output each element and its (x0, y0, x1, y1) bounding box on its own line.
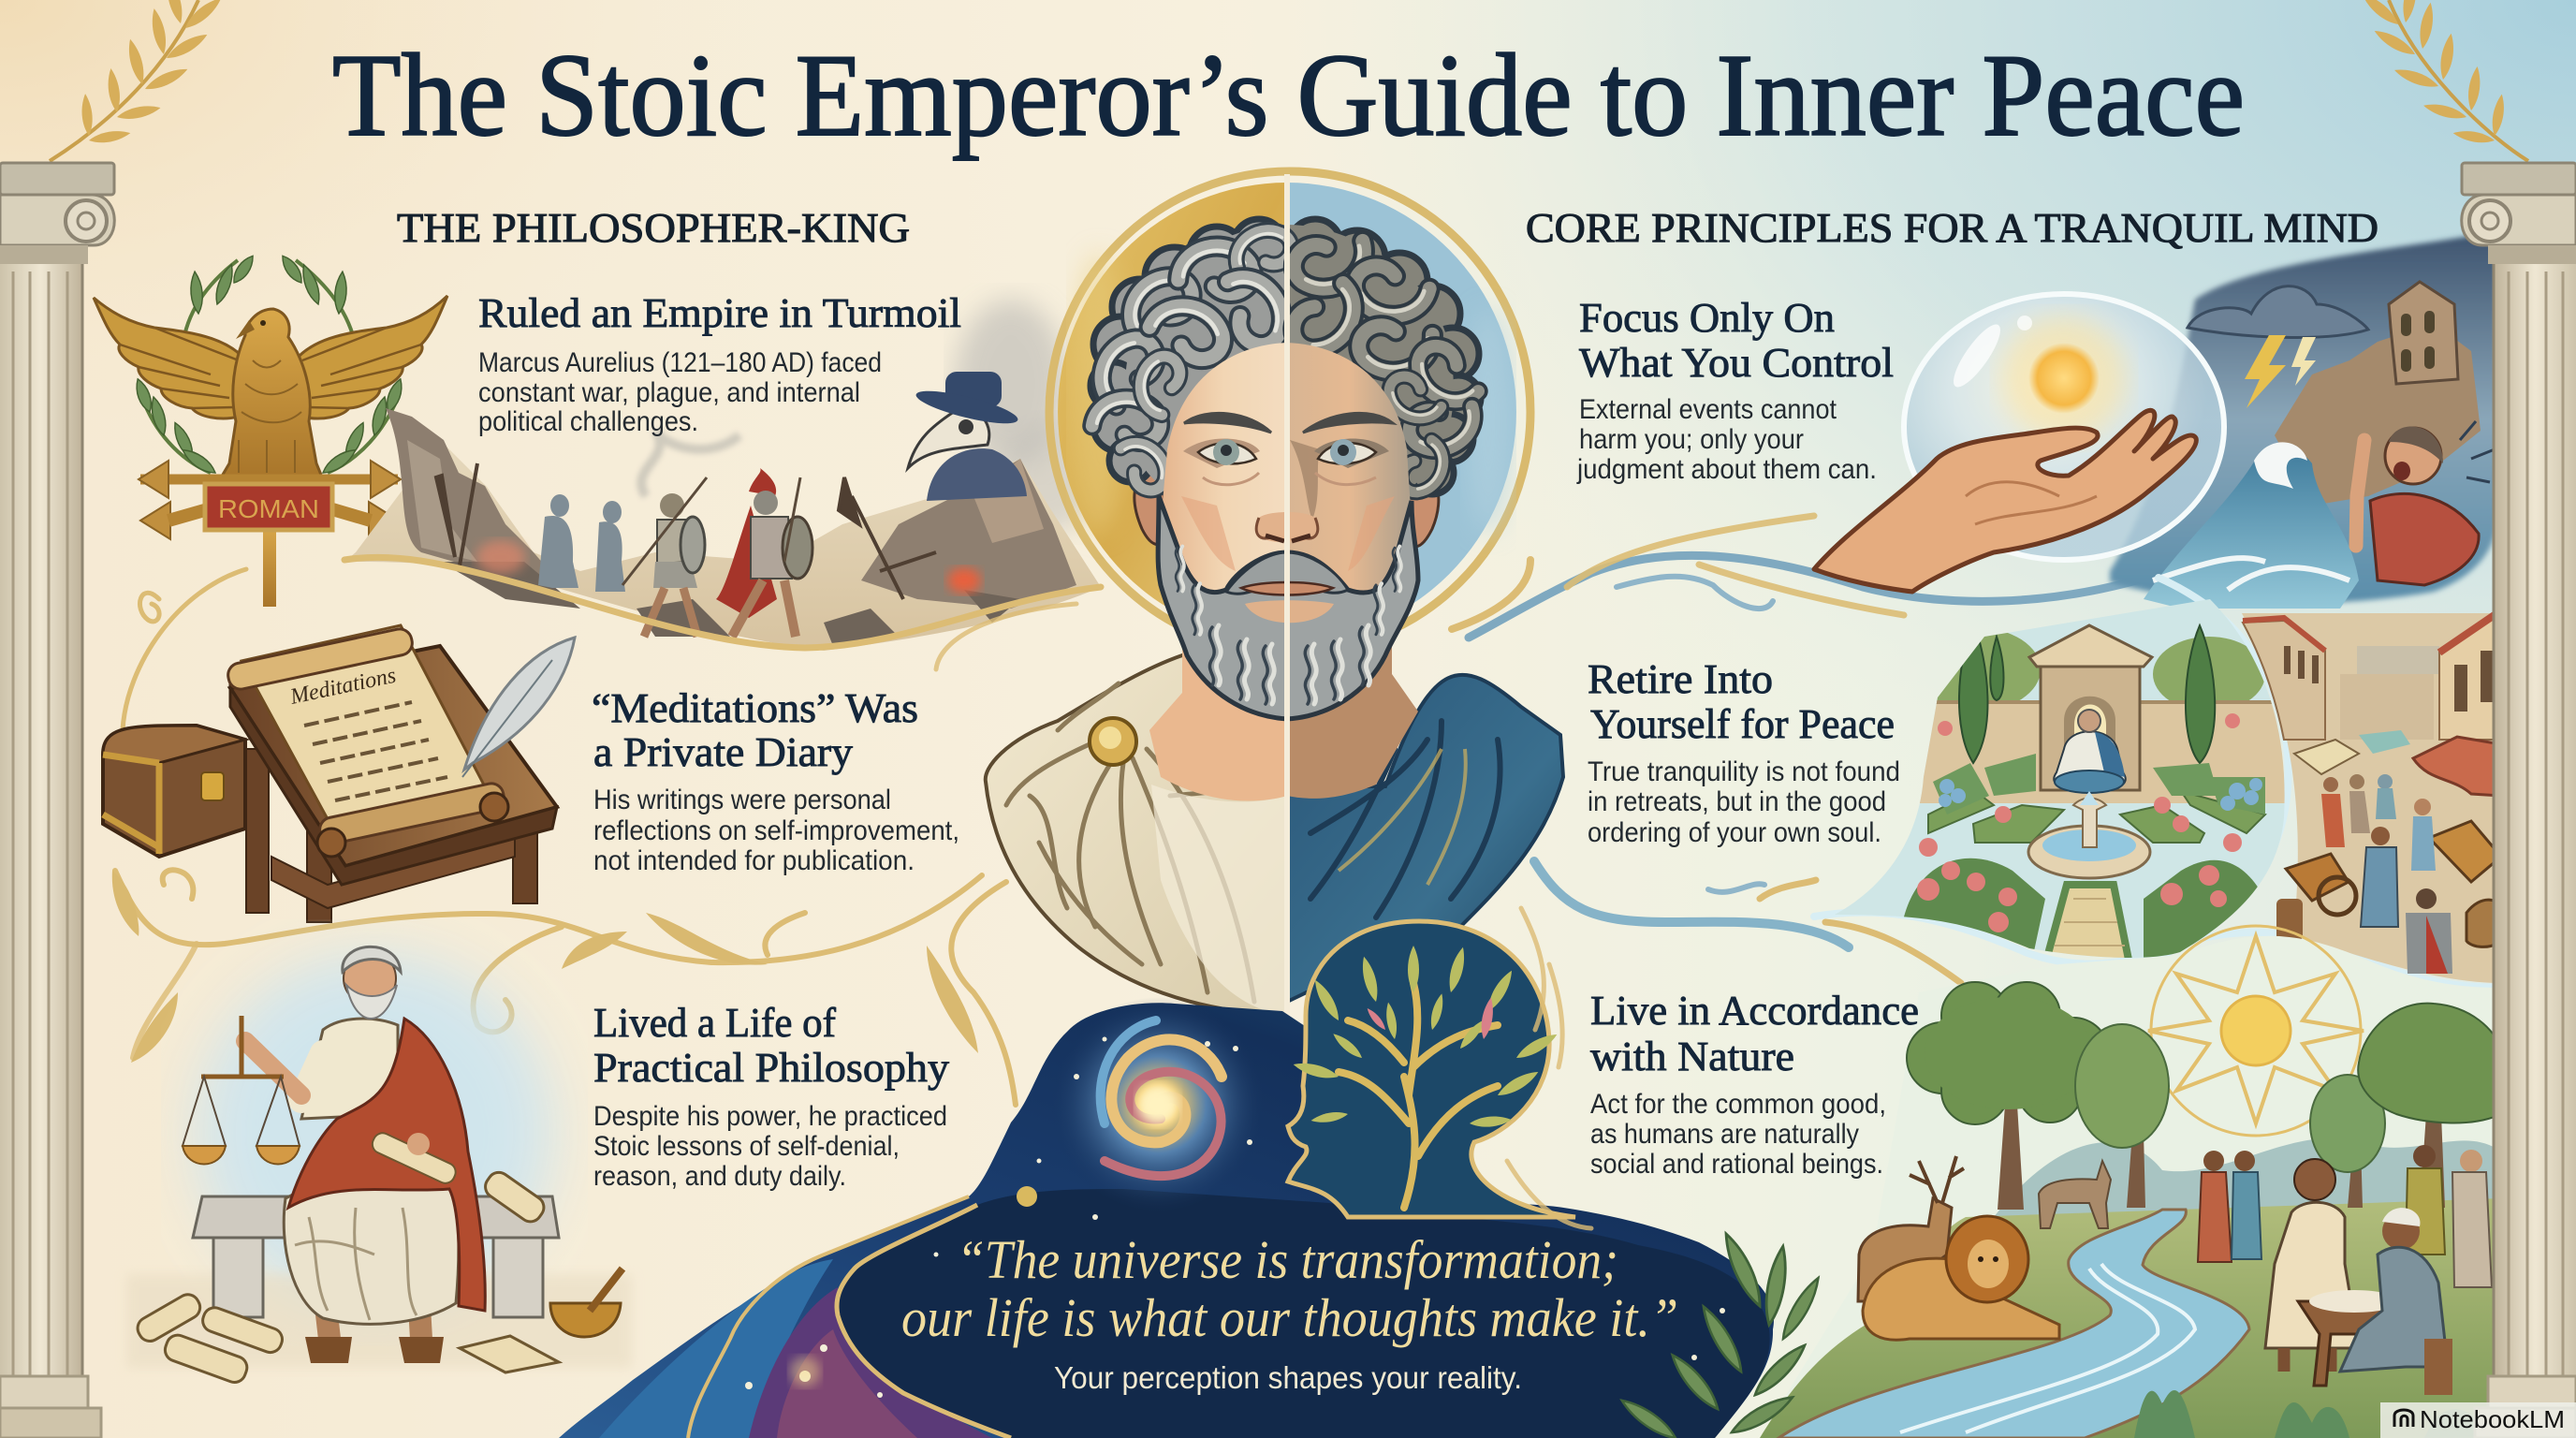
laurel branch top right (2359, 0, 2528, 161)
left building (2243, 621, 2325, 740)
text block: meditations: “Meditations” Was (592, 685, 918, 731)
gold flourish under war scene (123, 557, 1101, 730)
text block: practical philosophy: Despite his power, he practiced (593, 1101, 947, 1132)
nose (1257, 512, 1317, 542)
text block: live with nature: as humans are naturally (1590, 1119, 1859, 1150)
text block: live with nature: Act for the common good, (1590, 1089, 1886, 1120)
flower beds (1904, 858, 2045, 949)
quote: Your perception shapes your reality. (1054, 1360, 1522, 1395)
scroll in hand (370, 1130, 459, 1186)
text block: retire into yourself: in retreats, but in the good (1588, 786, 1886, 817)
perch and arrows (140, 474, 398, 485)
wings (94, 298, 253, 418)
blue and gold ribbon: right lower (1507, 861, 1961, 1228)
light ribbon around garden (1814, 578, 2504, 988)
portrait bust: toga and robe (986, 618, 1563, 1016)
illustration: war and plague scene (344, 300, 1101, 651)
text block: practical philosophy: reason, and duty daily. (593, 1161, 846, 1192)
bench (213, 1238, 263, 1317)
text block: live with nature: Live in Accordance (1590, 988, 1919, 1034)
cypress trees (1959, 621, 2215, 763)
text block: meditations: reflections on self-improvement, (593, 815, 959, 846)
market people (2321, 774, 2452, 974)
raised arm (301, 1053, 323, 1100)
text block: meditations: a Private Diary (593, 729, 853, 775)
awnings (2413, 737, 2501, 796)
two villagers (2406, 1145, 2492, 1287)
icon: writing desk with meditations scroll: Meditations (287, 664, 398, 710)
illustration: storm scene (2110, 234, 2499, 609)
sun (2148, 926, 2364, 1136)
text block: live with nature: with Nature (1590, 1034, 1794, 1079)
eagle body (220, 309, 323, 479)
right column (2462, 163, 2576, 1438)
heading: the philosopher-king: THE PHILOSOPHER-KING (397, 205, 910, 251)
cosmic silhouette background (559, 997, 1774, 1438)
roman soldier 2 with red cape (716, 468, 812, 637)
text block: practical philosophy: Practical Philosophy (593, 1045, 949, 1091)
text block: meditations: not intended for publication. (593, 845, 915, 876)
seated elder (2340, 1208, 2452, 1395)
two women (2198, 1151, 2261, 1262)
icon: open hand (1814, 410, 2196, 592)
text block: ruled an empire: Marcus Aurelius (121–180 AD) faced (478, 347, 882, 378)
text block: meditations (592, 685, 959, 876)
stalls (2429, 821, 2501, 882)
spears and fires (436, 463, 936, 599)
text block: retire into yourself: Retire Into (1588, 656, 1773, 702)
illustration: nature landscape (1760, 926, 2501, 1438)
red sash (288, 1019, 485, 1311)
text block: retire into yourself: True tranquility is not found (1588, 756, 1900, 787)
ears (1134, 468, 1439, 547)
face (1161, 343, 1287, 674)
illustration: philosopher seated with scales (126, 946, 632, 1386)
illustration: garden with meditating philosopher (1835, 599, 2293, 964)
text block: retire into yourself: ordering of your own soul. (1588, 817, 1881, 848)
hair mass with bumps (1090, 219, 1481, 494)
shouting man (2356, 426, 2479, 585)
gold vine flourish (115, 870, 1016, 1105)
skirt (284, 1181, 459, 1324)
quote: “The universe is transformation; (957, 1229, 1618, 1290)
right building (2439, 609, 2501, 740)
hair curls (1087, 227, 1482, 501)
deer (1858, 1156, 1964, 1301)
fountain (2028, 826, 2150, 878)
meditating figure (2054, 731, 2126, 791)
lion (1863, 1216, 2059, 1340)
text block: focus on control: External events cannot (1579, 394, 1837, 425)
blue and gold ribbon: right upper (1452, 516, 2153, 638)
text block: ruled an empire: political challenges. (478, 406, 698, 437)
halo behind portrait (1049, 171, 1530, 653)
text block: live with nature: social and rational beings. (1590, 1149, 1883, 1180)
text block: practical philosophy: Lived a Life of (593, 1000, 836, 1046)
shrine (2029, 625, 2152, 667)
tunic (301, 1019, 398, 1119)
icon: treasure chest (103, 726, 245, 857)
text block: focus on control: What You Control (1579, 340, 1894, 386)
notebooklm watermark (2380, 1402, 2576, 1438)
feet (326, 1306, 421, 1339)
text block: retire into yourself (1588, 656, 1900, 848)
text block: live with nature (1590, 988, 1919, 1180)
beard (1158, 496, 1418, 719)
man with parchment (2265, 1159, 2359, 1372)
gold vine leaves (112, 871, 978, 1063)
quote: our life is what our thoughts make it.” (901, 1287, 1678, 1348)
portrait head (1087, 219, 1482, 719)
icon: writing desk with meditations scroll (226, 625, 575, 922)
stone path (2045, 885, 2130, 964)
illustration: market scene (2242, 609, 2501, 983)
text block: ruled an empire: Ruled an Empire in Turmoil (478, 290, 961, 336)
mouth and chin (1241, 582, 1333, 595)
wreath (142, 260, 398, 473)
head silhouette with tree of thought (1288, 921, 1575, 1217)
text block: focus on control: Focus Only On (1579, 295, 1835, 341)
quote (901, 1229, 1678, 1395)
text block: practical philosophy: Stoic lessons of self-denial, (593, 1131, 900, 1162)
title: The Stoic Emperor’s Guide to Inner Peace (332, 31, 2245, 161)
roman soldier 1 (622, 477, 707, 637)
text block: focus on control: harm you; only your (1579, 424, 1804, 455)
trees (1907, 982, 2501, 1210)
foreground plants (2134, 1390, 2490, 1438)
text block: focus on control: judgment about them can. (1576, 454, 1877, 485)
scales (201, 1016, 284, 1077)
center divider line (1284, 174, 1290, 1017)
second deer (2039, 1161, 2111, 1228)
table (2298, 1301, 2406, 1386)
text block: practical philosophy (593, 1000, 949, 1192)
left column (0, 163, 114, 1438)
distant soldiers (538, 494, 625, 592)
notebooklm watermark: NotebookLM (2420, 1405, 2565, 1433)
heading: core principles: CORE PRINCIPLES FOR A TRANQUIL MIND (1526, 205, 2378, 251)
neck (1149, 618, 1287, 800)
text block: meditations: His writings were personal (593, 785, 891, 815)
brooch (1090, 718, 1136, 765)
text block: ruled an empire (478, 290, 961, 437)
text block: focus on control (1576, 295, 1894, 485)
icon: roman eagle standard: ROMAN (218, 494, 319, 523)
foreground leaves near cosmos (1618, 1230, 1824, 1438)
text block: retire into yourself: Yourself for Peace (1590, 701, 1895, 747)
text block: ruled an empire: constant war, plague, and internal (478, 377, 860, 408)
eyes and brows (1183, 413, 1393, 485)
illustration: bubble with inner sun (1904, 294, 2224, 560)
beard strands (1176, 547, 1401, 704)
plague doctor (908, 372, 1027, 501)
river (1778, 1210, 2249, 1438)
laurel branch top left (50, 0, 225, 161)
icon: roman eagle standard (94, 253, 447, 607)
